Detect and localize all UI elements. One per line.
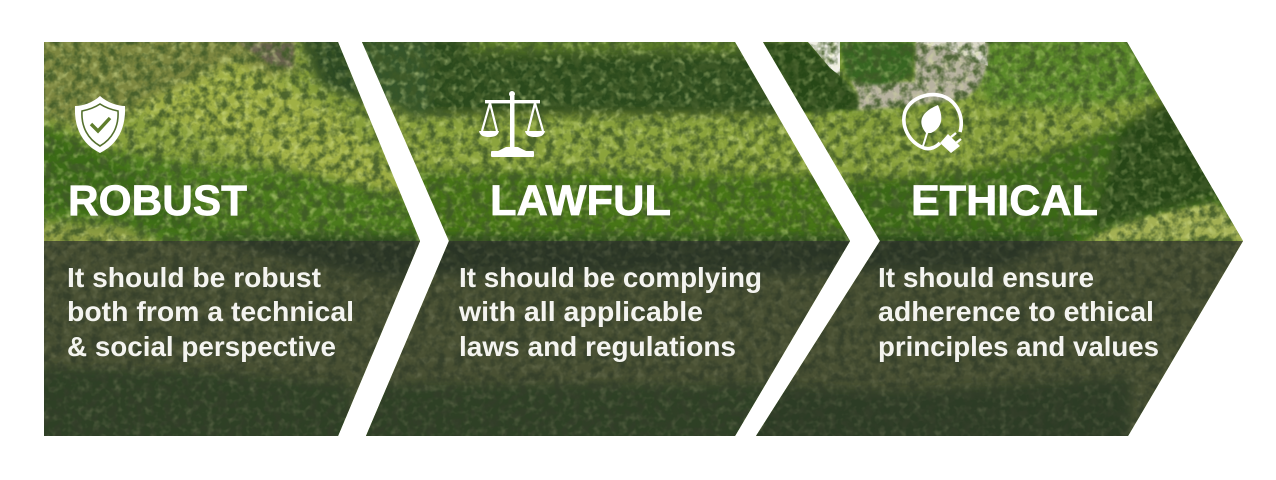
text: robust description: & social perspective (67, 331, 336, 362)
text: lawful description: laws and regulations (459, 331, 736, 362)
panel: ethical (750, 36, 1250, 445)
text: robust description (67, 262, 354, 362)
icon: scales of justice (479, 91, 545, 157)
text: ethical description: principles and values (878, 331, 1159, 362)
photo: hedge with dark overlay (44, 42, 420, 436)
heading: lawful: LAWFUL (490, 177, 671, 225)
text: lawful description (458, 262, 762, 362)
heading: ethical: ETHICAL (911, 177, 1098, 225)
text: ethical description (878, 262, 1159, 362)
text: ethical description: It should ensure (878, 262, 1094, 293)
photo: hedge garden with dark overlay (750, 36, 1250, 445)
text: robust description: both from a technical (67, 296, 354, 327)
heading: robust: ROBUST (68, 177, 247, 225)
panel: robust (44, 42, 420, 436)
text: ethical description: adherence to ethical (878, 296, 1154, 327)
panel: lawful (350, 30, 860, 445)
icon: leaf and plug (904, 95, 961, 153)
text: lawful description: with all applicable (458, 296, 703, 327)
icon: shield with check (75, 96, 125, 153)
photo: hedge with dark overlay (350, 30, 860, 445)
text: lawful description: It should be complying (459, 262, 762, 293)
text: robust description: It should be robust (67, 262, 321, 293)
